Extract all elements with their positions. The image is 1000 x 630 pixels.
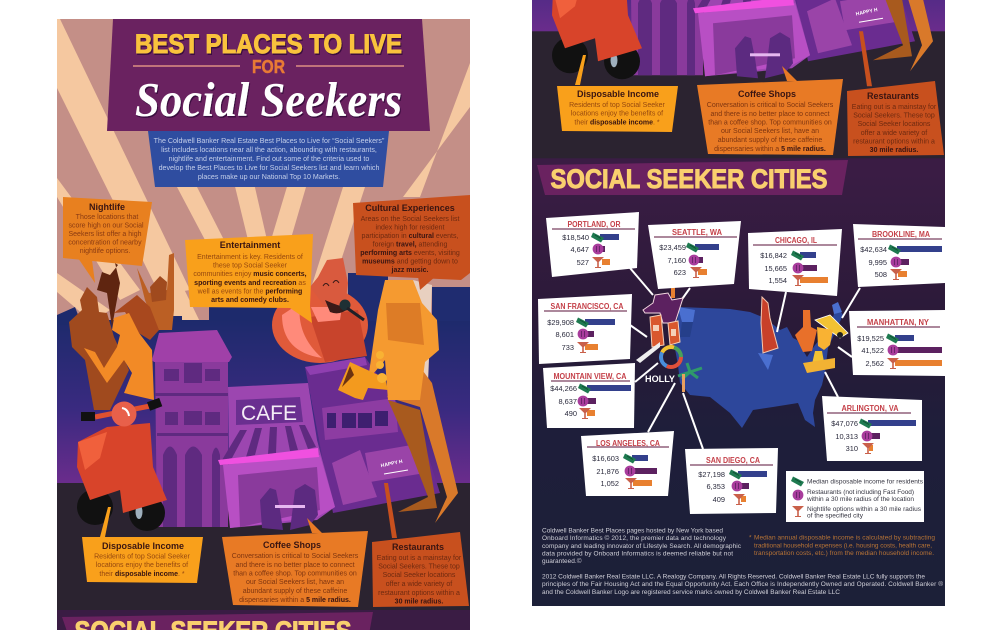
footer: data source note: data provided by Onboard Informatics is deemed reliable but not	[542, 550, 733, 558]
callout: cultural experiences: performing arts events, visiting	[360, 250, 460, 257]
city card: mountain view	[543, 363, 635, 428]
callout: nightlife: Those locations that	[76, 214, 138, 221]
city card: manhattan: 2,562	[866, 359, 884, 368]
callout: restaurants: Restaurants	[392, 542, 444, 552]
tower building	[152, 330, 232, 527]
city card: arlington	[822, 396, 922, 461]
dark street	[57, 483, 470, 613]
city card: brookline	[853, 224, 945, 287]
city card: chicago: 15,665	[764, 264, 787, 273]
callout: restaurants: restaurant options within a	[853, 138, 935, 146]
callout: coffee shops: Conversation is critical to Social Seekers	[707, 102, 834, 109]
callout: disposable income: locations enjoy the benefits of	[571, 110, 663, 118]
footnote: disposable income	[749, 534, 935, 557]
city card: san diego: $27,198	[698, 470, 725, 479]
city card: mountain view: MOUNTAIN VIEW, CA	[554, 372, 627, 381]
callout: cultural experiences: index high for resident	[376, 224, 444, 232]
callout: restaurants: offer a wide variety of	[386, 581, 452, 588]
panel: right poster page	[532, 0, 945, 606]
callout: disposable income	[82, 507, 203, 583]
callout: coffee shops: than a coffee shop. Top communities on	[708, 120, 832, 126]
callout: restaurants: 30 mile radius.	[870, 147, 918, 154]
city card: portland	[546, 212, 639, 277]
city card: los angeles: LOS ANGELES, CA	[596, 439, 660, 448]
panel: left poster page	[57, 19, 470, 630]
callout: cultural experiences: Cultural Experiences	[365, 203, 455, 213]
intro text box: nightlife and entertainment. Find out some of the criteria used to	[169, 155, 369, 163]
city card: manhattan: 41,522	[861, 346, 884, 355]
city card: chicago: 1,554	[768, 276, 787, 285]
city card: san francisco	[538, 294, 632, 364]
dark panel under street	[532, 172, 945, 606]
city card: seattle: 7,160	[668, 256, 686, 265]
background rays	[57, 19, 470, 339]
repeated street illustration	[532, 0, 945, 158]
callout: restaurants: Eating out is a mainstay for	[852, 104, 937, 111]
city card: seattle: 623	[674, 268, 686, 277]
callout: cultural experiences: participation in cultural events,	[362, 233, 459, 240]
right building	[305, 357, 440, 538]
footer: data source note	[542, 528, 742, 565]
callout: disposable income: their disposable income. *	[574, 120, 660, 126]
city card: san diego: 409	[713, 495, 725, 504]
city card: brookline: $42,634	[860, 245, 887, 254]
legend	[786, 471, 924, 522]
city card: san francisco: $29,908	[547, 318, 574, 327]
callout: coffee shops: Coffee Shops	[738, 89, 796, 99]
callout: nightlife: nightlife options.	[80, 248, 130, 255]
landmarks on the east coast	[795, 310, 848, 373]
footer: data source note: Onboard Informatics © 2012, the premier data and technology	[542, 534, 727, 542]
legend: Nightlife options within a 30 mile radius	[807, 506, 922, 513]
footer: legal copy: 2012 Coldwell Banker Real Estate LLC. A Realogy Company. All Rights Reserved. Coldwell Banker Real Estate LLC fully supports the	[542, 574, 925, 580]
intro text box: develop the Best Places to Live for Social Seekers list and learn which	[159, 164, 379, 172]
title line: social seekers: Social Seekers	[135, 72, 402, 127]
callout: disposable income: Disposable Income	[577, 89, 659, 99]
scene: nightlife street illustration	[57, 253, 470, 630]
city card: arlington: 310	[846, 444, 858, 453]
callout: restaurants: Eating out is a mainstay for	[377, 555, 462, 562]
callout: entertainment: sporting events and recreation as	[194, 280, 306, 287]
dancing couple	[69, 253, 174, 410]
city card: los angeles: 1,052	[600, 479, 619, 488]
city card: mountain view: $44,266	[550, 384, 577, 393]
lower band	[57, 610, 470, 630]
callout: coffee shops	[697, 66, 843, 155]
callout: cultural experiences	[353, 195, 470, 290]
callout: entertainment: Entertainment	[220, 240, 280, 250]
night sky	[57, 273, 470, 484]
callout: restaurants: restaurant options within a	[378, 590, 460, 597]
city card: brookline: BROOKLINE, MA	[872, 230, 930, 239]
dark background	[532, 158, 945, 606]
cafe building	[218, 383, 335, 530]
callout: nightlife	[63, 197, 152, 283]
city card: arlington: $47,076	[831, 419, 858, 428]
city card: portland: PORTLAND, OR	[568, 220, 621, 229]
city card: chicago: CHICAGO, IL	[775, 236, 817, 245]
callout: disposable income: locations enjoy the benefits of	[96, 562, 188, 569]
callout: restaurants: 30 mile radius.	[395, 598, 443, 606]
city card: portland: 4,647	[570, 245, 589, 254]
landmarks on the west coast	[636, 280, 702, 392]
city card: san diego: 6,353	[706, 482, 725, 491]
callout: restaurants	[372, 532, 469, 607]
callout: restaurants: Social Seekers. These top	[378, 564, 460, 570]
city card: portland: $18,540	[562, 233, 589, 242]
intro text box: list includes locations near all the action, abounding with restaurants,	[161, 146, 377, 154]
city card: san diego: SAN DIEGO, CA	[706, 456, 760, 465]
callout: coffee shops: than a coffee shop. Top communities on	[233, 570, 357, 578]
callout: nightlife: concentration of nearby	[68, 240, 142, 246]
city card: san francisco: 8,601	[556, 330, 574, 339]
callout: cultural experiences: Areas on the Social Seekers list	[361, 216, 459, 223]
callout: entertainment: well as events for the performing	[197, 288, 302, 296]
legend: of the specified city	[807, 512, 864, 520]
footer: legal copy	[542, 574, 943, 596]
callout: coffee shops: our Social Seekers list, have an	[721, 128, 819, 135]
footer: data source note: Coldwell Banker Best Places pages hosted by New York based	[542, 528, 723, 534]
cafe building: CAFE	[241, 402, 297, 425]
callout: nightlife: score high on our Social	[68, 222, 144, 230]
city card: manhattan: MANHATTAN, NY	[867, 318, 930, 327]
city card: mountain view: 8,637	[558, 397, 577, 406]
city card: los angeles: 21,876	[596, 467, 619, 476]
landmarks on the west coast: HOLLY	[645, 374, 676, 385]
callout: cultural experiences: museums and getting down to	[362, 258, 458, 266]
callout: restaurants: Social Seeker locations	[858, 121, 931, 128]
callout: restaurants: Restaurants	[867, 91, 919, 101]
city card: seattle: $23,459	[659, 243, 686, 252]
city card: mountain view: 490	[565, 409, 577, 418]
footnote: disposable income: traditional household expenses (i.e. housing costs, health care,	[754, 542, 932, 550]
connector lines from city cards to map	[630, 268, 860, 449]
right building: HAPPY H	[380, 459, 404, 469]
callout: coffee shops: dispensaries within a 5 mile radius.	[239, 597, 351, 604]
city card: san francisco: 733	[562, 343, 574, 352]
title line: best places to live: BEST PLACES TO LIVE	[135, 29, 402, 59]
city card: los angeles: $16,603	[592, 454, 619, 463]
callout: disposable income: Residents of top Social Seeker	[94, 554, 191, 560]
callout: cultural experiences: foreign travel, attending	[373, 242, 447, 248]
callout: coffee shops: and there is no better place to connect	[710, 111, 830, 118]
scooter	[77, 398, 167, 531]
callout: nightlife: Seekers list offer a high	[68, 231, 142, 238]
map: united states	[673, 302, 843, 428]
callout: coffee shops: abundant supply of these caffeine	[718, 137, 822, 144]
callout: disposable income	[557, 55, 678, 132]
title ribbon	[107, 19, 430, 131]
callout: nightlife: Nightlife	[89, 202, 125, 212]
intro text box: The Coldwell Banker Real Estate Best Places to Live for “Social Seekers”	[154, 137, 385, 145]
city card: los angeles	[581, 431, 674, 496]
callout: coffee shops: our Social Seekers list, have an	[246, 579, 344, 586]
city card: manhattan	[849, 310, 945, 376]
city card: chicago: $16,842	[760, 251, 787, 260]
callout: coffee shops	[222, 518, 368, 607]
footer: data source note: guaranteed.©	[542, 557, 582, 565]
callout: entertainment: these top Social Seeker	[213, 262, 288, 270]
callout: restaurants: Social Seeker locations	[383, 572, 456, 579]
legend: Restaurants (not including Fast Food)	[807, 489, 914, 496]
callout: entertainment: Entertainment is key. Residents of	[197, 254, 303, 261]
footer: data source note: company and leading innovator of Lifestyle Search. All demographic	[542, 543, 742, 550]
callout: coffee shops: abundant supply of these caffeine	[243, 588, 347, 595]
city card: manhattan: $19,525	[857, 334, 884, 343]
footer: legal copy: and the Coldwell Banker Logo are registered service marks owned by Coldwell Banker Real Estate LLC	[542, 589, 840, 596]
singer	[272, 258, 368, 363]
city card: brookline: 508	[875, 270, 887, 279]
callout: coffee shops: dispensaries within a 5 mile radius.	[714, 146, 826, 153]
city card: brookline: 9,995	[868, 258, 887, 267]
callout: coffee shops: Conversation is critical to Social Seekers	[232, 553, 359, 560]
city card: chicago	[748, 229, 842, 296]
legend: within a 30 mile radius of the location	[806, 496, 914, 503]
city card: san diego	[685, 448, 778, 514]
callout: entertainment	[185, 234, 313, 323]
intro text box	[148, 131, 389, 187]
heading ribbon: social seeker cities: SOCIAL SEEKER CITIES	[550, 164, 828, 194]
title line: for: FOR	[252, 57, 285, 77]
callout: coffee shops: Coffee Shops	[263, 540, 321, 550]
landmark: chicago tower	[761, 297, 778, 353]
saxophone player	[338, 280, 458, 523]
city card: portland: 527	[577, 258, 589, 267]
city card: san francisco: SAN FRANCISCO, CA	[550, 302, 624, 311]
footnote: disposable income: Median annual disposable income is calculated by subtracting	[754, 534, 935, 542]
footnote: disposable income: *	[749, 534, 752, 542]
callout: restaurants	[847, 81, 944, 156]
callout: restaurants: Social Seekers. These top	[853, 112, 935, 120]
callout: entertainment: arts and comedy clubs.	[211, 297, 289, 304]
intro text box: places make up our National Top 10 Markets.	[198, 173, 340, 181]
callout: entertainment: communities enjoy music concerts,	[193, 271, 307, 278]
callout: disposable income: Residents of top Social Seeker	[569, 102, 666, 109]
city card: seattle	[648, 221, 741, 289]
callout: restaurants: offer a wide variety of	[861, 130, 927, 137]
footer: legal copy: principles of the Fair Housing Act and the Equal Opportunity Act. Each Office is Independently Owned and Operated. Coldwell Banker ®	[542, 580, 943, 588]
city card: arlington: 10,313	[835, 432, 858, 441]
legend: Median disposable income for residents	[807, 478, 924, 486]
callout: disposable income: their disposable income. *	[99, 571, 185, 578]
city card: arlington: ARLINGTON, VA	[842, 404, 899, 413]
callout: coffee shops: and there is no better place to connect	[235, 562, 355, 569]
footnote: disposable income: transportation costs, etc.) from the median household income.	[754, 550, 934, 557]
callout: disposable income: Disposable Income	[102, 541, 184, 551]
callout: cultural experiences: jazz music.	[391, 267, 429, 274]
city card: seattle: SEATTLE, WA	[672, 228, 722, 237]
